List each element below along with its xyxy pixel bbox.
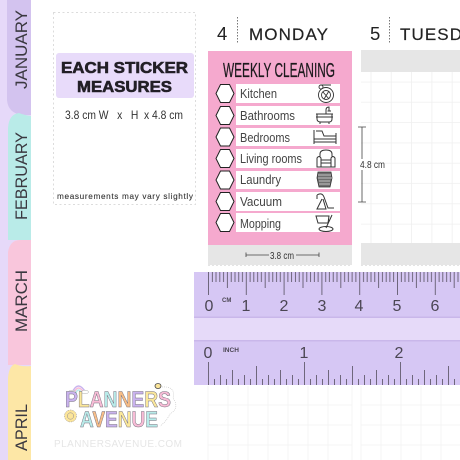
icon: rainbow <box>68 386 88 394</box>
icon: sun <box>64 410 76 422</box>
day header: Tuesday <box>370 17 460 44</box>
checklist row: Kitchen: Kitchen <box>240 86 277 101</box>
checklist row: Laundry: Laundry <box>240 172 281 187</box>
inch scale: 1 <box>300 345 309 362</box>
checklist row: Living rooms: Living rooms <box>240 151 302 166</box>
icon: vacuum <box>317 194 334 209</box>
tab: January <box>7 0 31 115</box>
panel: sticker size note <box>54 12 196 204</box>
icon: bed <box>314 130 336 144</box>
planner column: Tuesday <box>361 50 460 265</box>
logo: Planners Avenue <box>64 384 176 432</box>
gray footer under sticker <box>208 245 352 265</box>
centimetre scale: 4 <box>355 298 364 315</box>
inch scale: INCH <box>223 347 239 354</box>
footnote: measurements may vary slightly <box>57 192 194 201</box>
centimetre scale: 5 <box>393 298 402 315</box>
day header: Monday <box>217 17 328 44</box>
tab: February: FEBRUARY <box>13 132 31 220</box>
dimensions text: 3.8 cm W x H x 4.8 cm <box>65 108 183 122</box>
logo word: Planners: PLANNERS <box>65 387 171 412</box>
icon: bathtub <box>316 107 333 124</box>
ruler <box>194 272 460 385</box>
icon: mop and bucket <box>316 215 333 232</box>
checklist row: Bathrooms: Bathrooms <box>240 108 295 123</box>
icon: bee trail <box>155 384 176 426</box>
lower planner grid <box>208 266 460 460</box>
side strip with month tabs <box>0 0 31 460</box>
tab: January: JANUARY <box>13 10 31 89</box>
checklist row: Vacuum: Vacuum <box>240 194 282 209</box>
checklist row: Kitchen <box>216 84 340 103</box>
dimension: 3.8 cm width <box>246 250 319 262</box>
checklist row: Mopping: Mopping <box>240 216 281 231</box>
centimetre scale: 1 <box>242 298 251 315</box>
tab: April <box>8 364 31 460</box>
inch scale: 0 <box>204 345 213 362</box>
tab: March <box>8 240 31 365</box>
checklist row: Bathrooms <box>216 106 340 125</box>
heading: each sticker measures <box>56 53 194 98</box>
dimension: 4.8 cm height: 4.8 cm <box>360 159 385 171</box>
checklist row: Laundry <box>216 171 340 189</box>
dimension: 3.8 cm width: 3.8 cm <box>270 250 294 262</box>
sticker title: WEEKLY CLEANING <box>223 59 335 82</box>
checklist row: Living rooms <box>216 149 340 168</box>
checklist row: Bedrooms: Bedrooms <box>240 130 290 145</box>
checklist row: Vacuum <box>216 192 340 211</box>
tab: February <box>8 113 31 240</box>
heading: each sticker measures: MEASURES <box>77 79 172 96</box>
checklist row: Mopping <box>216 213 340 232</box>
sticker: weekly cleaning <box>208 51 352 245</box>
website url: PLANNERSAVENUE.COM <box>54 439 182 450</box>
centimetre scale: CM <box>222 298 231 304</box>
inch scale: 2 <box>395 345 404 362</box>
centimetre scale: 2 <box>280 298 289 315</box>
dimension: 4.8 cm height <box>358 127 385 202</box>
icon: armchair <box>317 150 335 167</box>
centimetre scale <box>205 272 460 315</box>
centimetre scale: 3 <box>318 298 327 315</box>
inch scale <box>204 345 460 385</box>
icon: dishes <box>318 85 334 102</box>
icon: laundry basket <box>317 172 332 187</box>
day header: Monday: MONDAY <box>249 25 328 44</box>
tab: March: MARCH <box>13 270 31 332</box>
tab: April: APRIL <box>13 404 31 451</box>
centimetre scale: 6 <box>431 298 440 315</box>
centimetre scale: 0 <box>205 298 214 315</box>
day header: Tuesday: 5 <box>370 23 380 44</box>
heading: each sticker measures: EACH STICKER <box>61 60 188 77</box>
checklist row: Bedrooms <box>216 128 340 146</box>
day header: Monday: 4 <box>217 23 227 44</box>
logo word: Avenue: AVENUE <box>80 407 158 432</box>
